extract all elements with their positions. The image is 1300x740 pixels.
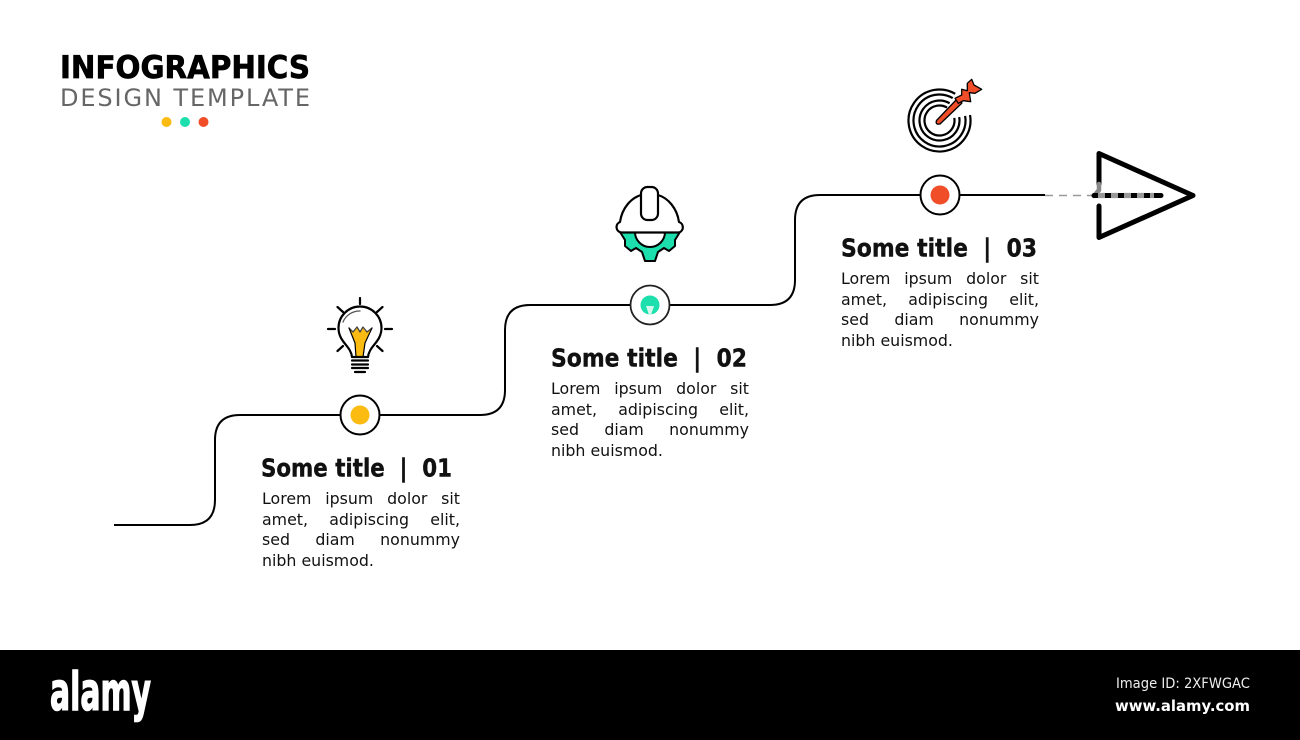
- step 03 body text: sed diam nonummy: [841, 310, 1039, 329]
- step 01 body text: sed diam nonummy: [262, 530, 460, 549]
- step 03 body text: amet, adipiscing elit,: [841, 290, 1039, 309]
- footer website: www.alamy.com: [1115, 697, 1250, 715]
- step 02 body text: sed diam nonummy: [551, 420, 749, 439]
- step 02 body text: nibh euismod.: [551, 441, 663, 460]
- node 02: [630, 286, 670, 324]
- node 03: [920, 176, 960, 214]
- step 02 body text: amet, adipiscing elit,: [551, 400, 749, 419]
- step 01 body text: nibh euismod.: [262, 551, 374, 570]
- icon: light bulb: [328, 298, 392, 372]
- stepped timeline line: [114, 195, 1045, 525]
- icon: target with arrow: [904, 79, 982, 156]
- title: infographics: INFOGRAPHICS: [60, 50, 310, 86]
- step 03 body text: Lorem ipsum dolor sit: [841, 269, 1039, 288]
- title block: [60, 50, 310, 127]
- subtitle: design template: DESIGN TEMPLATE: [60, 84, 310, 112]
- footer bar: [0, 650, 1300, 740]
- step 03 title: Some title | 03: [841, 234, 1037, 262]
- node 01: [340, 396, 380, 434]
- step 01 body text: amet, adipiscing elit,: [262, 510, 460, 529]
- step 02 body text: [551, 379, 749, 460]
- step 03 body text: [841, 269, 1039, 350]
- step 02 title: Some title | 02: [551, 344, 747, 372]
- step 02 body text: Lorem ipsum dolor sit: [551, 379, 749, 398]
- step 01 body text: [262, 489, 460, 570]
- step 03 body text: nibh euismod.: [841, 331, 953, 350]
- footer logo: alamy: alamy: [50, 662, 151, 723]
- step 01 body text: Lorem ipsum dolor sit: [262, 489, 460, 508]
- footer image id: Image ID: 2XFWGAC: [1116, 676, 1250, 692]
- step 01 title: Some title | 01: [261, 454, 452, 482]
- decorative colour dots: [162, 117, 208, 127]
- icon: helmet and gear: [617, 187, 683, 261]
- arrow head: [1045, 154, 1193, 238]
